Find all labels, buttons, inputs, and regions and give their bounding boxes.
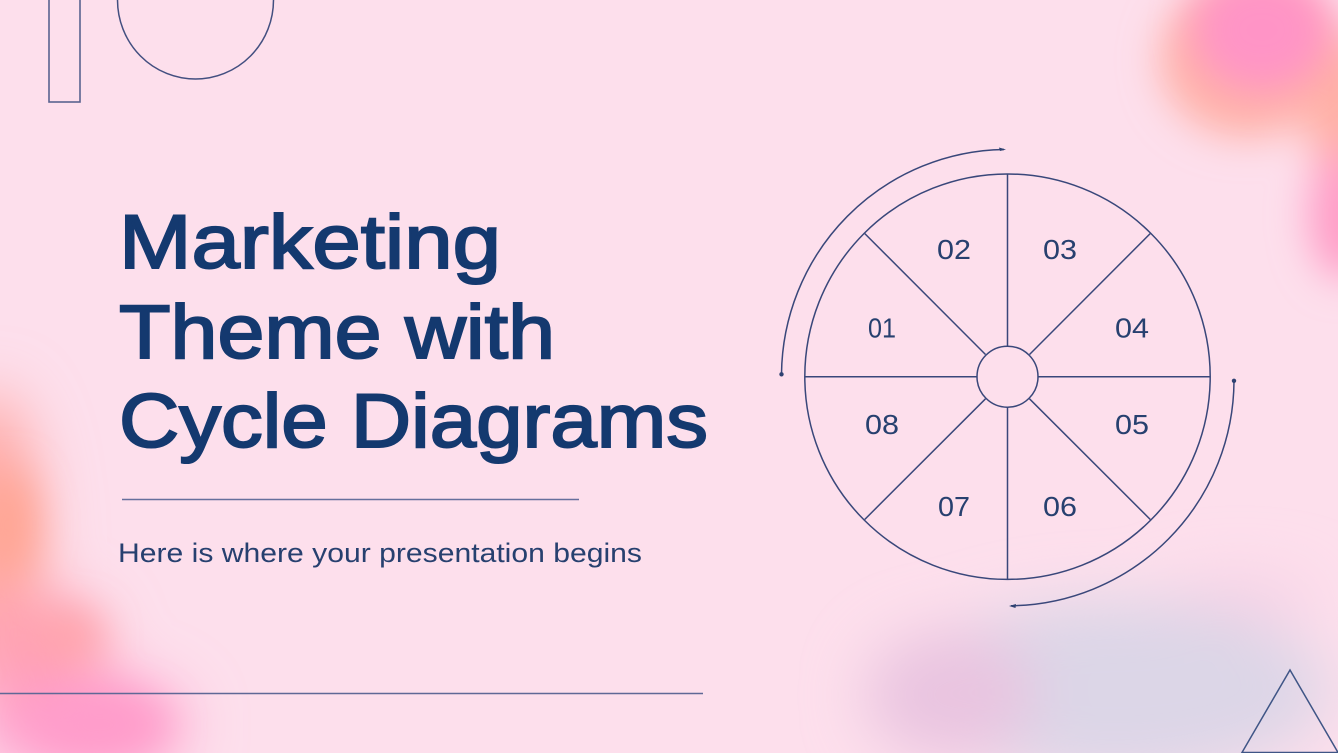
segment numbers (865, 234, 1149, 522)
segment numbers: 04 (1115, 312, 1149, 344)
blob: top right gradient (1160, 0, 1338, 280)
title divider line (122, 498, 579, 500)
segment numbers: 08 (865, 409, 899, 440)
segment numbers: 07 (938, 491, 970, 522)
title: Cycle Diagrams (119, 379, 708, 464)
title (119, 200, 708, 464)
bottom left horizontal line (0, 692, 703, 694)
blob: bottom left gradient (0, 390, 185, 753)
decorative rectangle top left (49, 0, 80, 102)
segment numbers: 06 (1043, 491, 1077, 522)
subtitle: Here is where your presentation begins (118, 538, 642, 568)
outer wheel with spokes (805, 174, 1210, 579)
segment numbers: 05 (1115, 409, 1149, 440)
decorative semicircle top (118, 0, 274, 79)
title: Marketing (119, 200, 501, 285)
title: Theme with (119, 290, 555, 375)
segment numbers: 02 (937, 234, 971, 265)
segment numbers: 01 (868, 312, 896, 344)
blob: bottom right gradient (865, 576, 1330, 753)
arrow: lower right arc (1009, 379, 1236, 608)
arrow: upper left arc (779, 148, 1006, 376)
segment numbers: 03 (1043, 234, 1077, 265)
cycle diagram (779, 148, 1236, 608)
decorative triangle bottom right (1242, 670, 1338, 752)
